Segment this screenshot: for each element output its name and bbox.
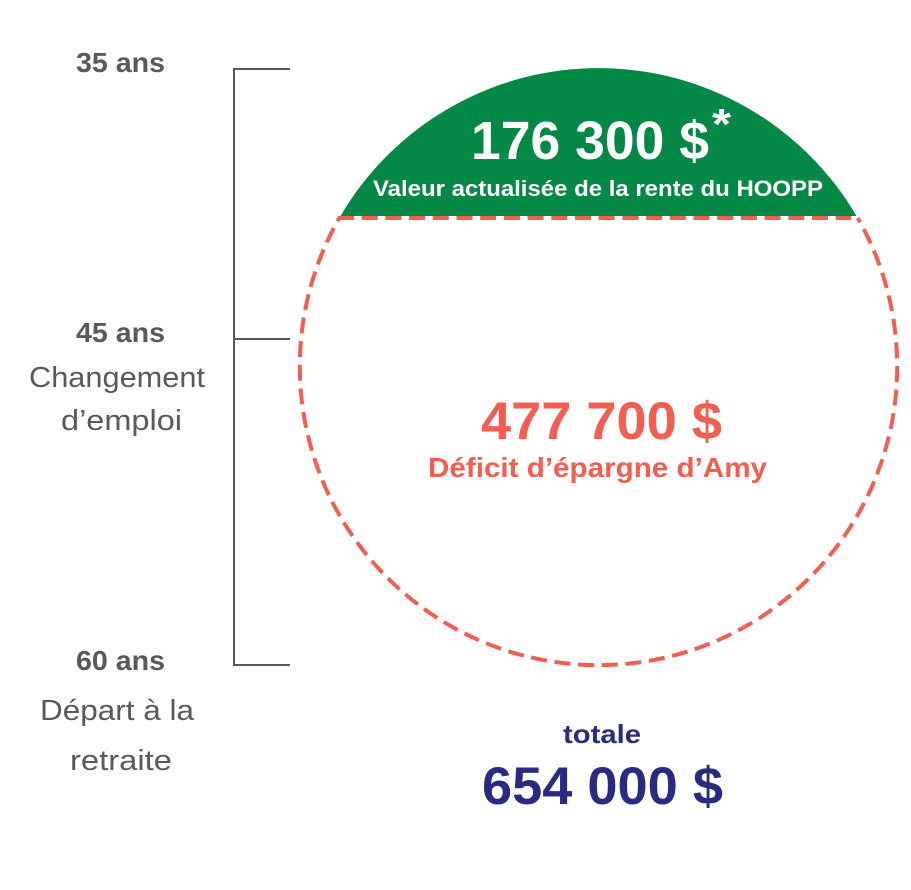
pension value: 176 300 $	[471, 111, 709, 171]
timeline bracket	[234, 69, 290, 665]
circle: green pension segment	[340, 68, 856, 216]
savings gap: 477 700 $	[481, 392, 722, 451]
pension caption: Valeur actualisée de la rente du HOOPP	[373, 176, 823, 201]
label: 35 ans: 35 ans	[76, 47, 165, 78]
label: 45 ans, job change	[29, 317, 205, 437]
label: 45 ans, job change: Changement	[29, 362, 205, 394]
label: 45 ans, job change: d’emploi	[61, 405, 182, 437]
label: 60 ans, retirement: Départ à la	[40, 695, 195, 727]
total: totale	[563, 719, 641, 749]
pension value	[373, 100, 823, 201]
total amount: 654 000 $	[482, 757, 723, 816]
circle: red dashed savings gap	[300, 218, 897, 665]
label: 45 ans, job change: 45 ans	[76, 317, 165, 348]
savings gap	[428, 392, 767, 483]
label: 60 ans, retirement: 60 ans	[76, 645, 165, 676]
age labels	[29, 47, 205, 777]
label: 60 ans, retirement	[40, 645, 195, 777]
asterisk: *	[712, 100, 732, 149]
total	[482, 719, 723, 816]
savings gap caption: Déficit d’épargne d’Amy	[428, 452, 767, 483]
dashed divider	[338, 216, 851, 220]
label: 60 ans, retirement: retraite	[70, 745, 172, 777]
